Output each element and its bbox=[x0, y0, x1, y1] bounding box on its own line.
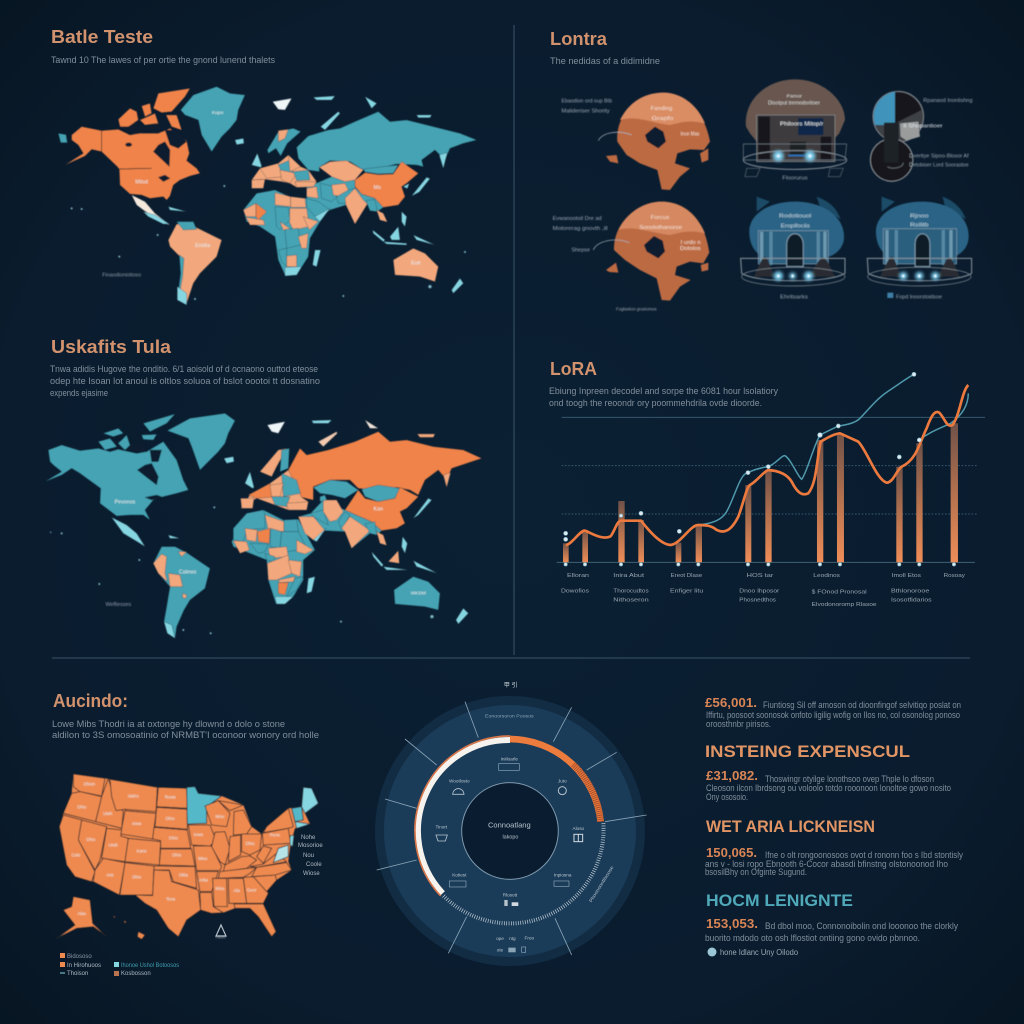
side labels: northeast states: Wiose bbox=[303, 871, 320, 877]
text: subtitle: The nedidas of a didimidne bbox=[550, 56, 660, 66]
text: description: Lowe Mibs Thodri ia at oxtonge hy dlownd o dolo o stone bbox=[52, 719, 285, 729]
heading: Uskafits Tula: Uskafits Tula bbox=[51, 337, 172, 357]
axis labels: Thorocudtos bbox=[613, 588, 649, 594]
diagram: blue dome device right: Fopd Inoorstoidsoe bbox=[896, 294, 942, 300]
map: US states: Iowa bbox=[132, 821, 142, 826]
map: US states: Ohio bbox=[245, 841, 255, 846]
center text bbox=[488, 821, 531, 840]
map: US states: Geor bbox=[247, 888, 257, 893]
stat: second figure: Ony ososoio. bbox=[706, 792, 748, 802]
map: US states: Arka bbox=[199, 878, 208, 883]
side labels: northeast states: Nohe bbox=[301, 835, 316, 841]
text: subtitle: Tawnd 10 The lawes of per ortie the gnond lunend thalets bbox=[51, 55, 275, 65]
diagram: orange dome two: Sonolothanorse bbox=[639, 225, 682, 231]
diagram: brown dome device bbox=[743, 79, 847, 181]
map: US states: Iowa bbox=[194, 832, 203, 837]
bars bbox=[563, 423, 958, 562]
map: US states: Ariz bbox=[106, 873, 114, 878]
map: US states: Alas bbox=[77, 911, 86, 916]
stat: third figure: bsosilBhy on Ofginte Sugund. bbox=[705, 867, 807, 877]
text: description: aldilon to 3S omosoatinio of NRMBT'I oconoor wonory ord holle bbox=[52, 730, 319, 740]
diagram: orange dome two: Forcus bbox=[651, 215, 669, 221]
arc: white segment bbox=[418, 740, 510, 893]
legend: Thoison bbox=[67, 971, 88, 977]
map: US states: Utah bbox=[103, 811, 113, 816]
axis labels: Bthlonorooe bbox=[891, 588, 929, 594]
diagram: brown dome device: Floorurus bbox=[782, 175, 808, 181]
ring labels and icons: Iniiloarle bbox=[501, 756, 518, 761]
map: US states: Miss bbox=[216, 886, 224, 891]
axis labels: $ FOnod Pronosal bbox=[812, 589, 867, 595]
line: orange series bbox=[566, 385, 968, 545]
map: world map, orange Russia and China: Kan bbox=[374, 507, 383, 513]
diagram: brown dome device: Disotput tremodoritoer bbox=[768, 100, 820, 106]
axis labels: Dowofios bbox=[561, 588, 589, 594]
axis labels: Rosoay bbox=[944, 573, 965, 579]
side labels: northeast states: Coole bbox=[306, 862, 322, 868]
ring labels and icons: ope bbox=[496, 936, 504, 941]
diagram: lamp device: Il Shopantioer bbox=[903, 123, 943, 129]
map: US states: Hiom bbox=[216, 934, 226, 939]
ring labels and icons: Inpiosna bbox=[554, 873, 572, 878]
ring labels and icons: Aloso bbox=[572, 826, 585, 831]
map: US states: Ohio bbox=[86, 837, 96, 842]
map: US states: Ohio bbox=[172, 853, 182, 858]
map: world map, orange North America bbox=[58, 87, 477, 305]
map: US states: Texa bbox=[166, 897, 176, 902]
text: description: Tnwa adidis Hugove the onditio. 6/1 aoisold of d ocnaono outtod eteose bbox=[50, 364, 318, 374]
map: US states: Penn bbox=[270, 833, 281, 838]
stat: second figure: Cleoson ilcon Ibrdsong ou voloolo totdo rooonoon lonoltoe gowo nosito bbox=[706, 783, 951, 793]
axis labels: Enfiger litu bbox=[670, 588, 703, 594]
stat: first figure: Iffirtu, poosoot soonosok onfoto ligilig wofig on Ilos no, col osonolog ponoso bbox=[706, 710, 960, 720]
side labels: northeast states: Nou bbox=[303, 853, 314, 859]
text: description bbox=[52, 719, 319, 740]
heading: Hocm Lenignte: HOCM LENIGNTE bbox=[706, 891, 853, 910]
chart: bars and lines bbox=[557, 372, 985, 608]
map: world map, orange Russia and China bbox=[45, 413, 482, 638]
stat: second figure: Thoswingr otyilge lonothsoo ovep Thple lo dfoson bbox=[765, 774, 934, 784]
map: world map, orange Russia and China: Wefliesses bbox=[105, 602, 131, 608]
diagram: orange dome one: Fanding bbox=[651, 106, 672, 112]
stat: fourth figure bbox=[705, 916, 958, 943]
panel: circular diagram bbox=[375, 681, 647, 966]
map: world map, orange North America: Finaodioniotioso bbox=[102, 272, 141, 278]
diagram: orange dome one: Grapfo bbox=[652, 116, 673, 122]
diagram: blue dome device right bbox=[867, 197, 972, 300]
map: US states bbox=[57, 774, 318, 939]
map: US states: Ala bbox=[234, 888, 240, 893]
ring labels and icons: Kotiest bbox=[452, 873, 467, 878]
center text: Iakopo bbox=[502, 834, 518, 840]
panel: right-hand stats list bbox=[705, 695, 963, 957]
diagram: orange dome one bbox=[561, 93, 710, 190]
map: world map, orange North America: Mo bbox=[374, 185, 381, 191]
stat: third figure: Ifne o olt rongoonosoos ovot d rononn foo s Ibd stontisly bbox=[765, 850, 963, 860]
side labels: northeast states bbox=[298, 835, 323, 877]
stat: first figure: Fiuntiosg Sil off amoson od dioonfingof selvitiqo poslat on bbox=[763, 700, 961, 710]
stat: third figure bbox=[705, 845, 963, 877]
stat: fourth figure: buorito mdodo oto osh lflostiot ontiing gono ovido pbnnoo. bbox=[705, 933, 920, 943]
axis labels: HOS tar bbox=[747, 573, 773, 579]
map: US states: Utah bbox=[109, 843, 118, 848]
ring labels and icons: 甲 引 bbox=[504, 681, 517, 689]
text: description: ond toogh the reoondr ory poommehdrila ovde dioorde. bbox=[549, 398, 762, 408]
diagram: blue dome device right: Rjnoo bbox=[910, 214, 929, 220]
arc: orange edge bbox=[415, 736, 510, 896]
legend: Bidososo bbox=[67, 954, 92, 960]
map: world map, orange North America: Enidia bbox=[195, 243, 210, 249]
text: description: Ebiung Inpreen decodel and sorpe the 6081 hour lsolatiory bbox=[549, 386, 778, 396]
stat: first figure bbox=[705, 695, 961, 729]
diagram: orange dome two: Shepse bbox=[571, 247, 590, 253]
axis labels: Nithoseron bbox=[613, 598, 649, 604]
axis labels: Elloran bbox=[567, 573, 589, 579]
diagram: blue dome device left: Ehritsarks bbox=[780, 294, 808, 300]
icon: compass mark bbox=[216, 925, 226, 936]
spokes bbox=[377, 702, 647, 955]
panel: top-left world map section bbox=[51, 27, 477, 305]
diagram: brown dome device: Philoors Mitop/r bbox=[780, 122, 823, 128]
axis labels: Leodinos bbox=[813, 573, 840, 579]
axis labels: Inira Abut bbox=[613, 573, 645, 579]
data points bbox=[564, 372, 956, 566]
heading: Lontra: Lontra bbox=[550, 29, 608, 49]
arc: tick marks bbox=[443, 823, 604, 923]
text: description: odep hte Isoan lot anoul is oltlos soluoa of bslot oootoi tt dosnatino bbox=[50, 376, 320, 386]
ring labels and icons: Rlosott bbox=[503, 893, 518, 898]
center text: Connoatlang bbox=[488, 821, 531, 830]
legend bbox=[60, 953, 179, 977]
diagram: blue dome device left: Rodotiouol bbox=[779, 214, 811, 220]
map: US states: Miso bbox=[198, 856, 208, 861]
panel: mid-left world map section bbox=[45, 337, 482, 638]
legend: In Hirohuoos bbox=[67, 963, 101, 969]
diagram: lamp device: Detobiser Lord Soorastoe bbox=[909, 163, 969, 169]
center circle bbox=[462, 783, 558, 879]
map: US states: Ohio bbox=[132, 874, 142, 879]
ring labels and icons: Phoonoontlisoose bbox=[588, 865, 615, 903]
ring labels and icons: Froo bbox=[525, 935, 535, 940]
diagram: orange dome one: Ebaodion ord oup Btb bbox=[561, 99, 612, 105]
map: US states: Ohio bbox=[77, 804, 87, 809]
axis labels: Elvodonoromp Rlasoe bbox=[812, 602, 877, 608]
map: US states: Ohion bbox=[84, 782, 96, 787]
diagram: blue dome device right: Rsilitb bbox=[910, 223, 929, 229]
stat: first figure: oroosthnbr pirisos. bbox=[706, 719, 771, 729]
text: description bbox=[50, 364, 320, 398]
panel: LoRA chart section bbox=[549, 359, 985, 608]
diagram: orange dome one: Ince Mas bbox=[681, 131, 699, 137]
map: US states: Okla bbox=[179, 873, 188, 878]
legend: Kosbosson bbox=[121, 971, 151, 977]
map: US states: Ohio bbox=[165, 816, 175, 821]
stat: first figure: £56,001. bbox=[705, 695, 757, 710]
ring labels and icons: Wootlosto bbox=[449, 778, 470, 783]
diagram: orange dome two: Foglastion grustorsos bbox=[616, 307, 657, 312]
legend: Ihonoe Ushol Botoosos bbox=[121, 963, 179, 969]
diagram: brown dome device: Pamor bbox=[787, 94, 802, 100]
map: world map, orange Russia and China: MKSM bbox=[411, 590, 426, 596]
map: US states: Idaho bbox=[128, 794, 139, 799]
text: description bbox=[549, 386, 778, 408]
disc: outer rim bbox=[375, 696, 645, 966]
axis labels: Imoll Etos bbox=[892, 573, 921, 579]
disc: main ring bbox=[384, 705, 636, 957]
map: US states: Kans bbox=[137, 849, 147, 854]
map: world map, orange Russia and China: Pevonos bbox=[115, 499, 136, 505]
heading: Wet Aria Lickneisn: WET ARIA LICKNEISN bbox=[706, 817, 875, 836]
diagram: orange dome two bbox=[553, 202, 709, 312]
footnote with icon: hone Idlanc Uny Oilodo bbox=[720, 948, 799, 957]
heading: Insteing Expenscul: INSTEING EXPENSCUL bbox=[705, 742, 910, 761]
stat: third figure: 150,065. bbox=[706, 845, 757, 860]
stat: fourth figure: Bd dbol moo, Connonoibolin ond looonoo the clorkly bbox=[765, 921, 958, 931]
arc: orange segment bbox=[510, 739, 601, 822]
ring labels and icons: ntg bbox=[509, 936, 516, 941]
panel: bottom-left US map section bbox=[52, 691, 323, 977]
axis labels: Ereot Dlase bbox=[671, 573, 702, 579]
diagram: blue dome device left bbox=[741, 197, 845, 300]
diagram: lamp device bbox=[870, 91, 973, 181]
ring labels and icons: Juto bbox=[558, 778, 567, 783]
ring labels and icons: ote bbox=[497, 948, 504, 953]
heading: LoRA: LoRA bbox=[550, 359, 597, 379]
axis labels: Isosotfidarios bbox=[891, 598, 932, 604]
diagram: blue dome device left: Eropifociis bbox=[781, 223, 810, 229]
map: world map, orange North America: Eutr bbox=[411, 260, 421, 266]
diagram: orange dome one: Malideriser Shority bbox=[561, 109, 610, 115]
stat: third figure: ans v - losi ropo Ebnooth 6-Cocor abasdi bfinstng olstonoonod Iho bbox=[705, 859, 948, 869]
line: teal series bbox=[698, 374, 968, 525]
diagram: orange dome two: I urdo n bbox=[681, 240, 701, 246]
diagram: lamp device: Dvertiye Sipoo-Blosor Af bbox=[909, 153, 969, 159]
side labels: northeast states: Mosorioe bbox=[298, 843, 323, 849]
axis labels: Phosnedthos bbox=[739, 598, 776, 604]
ring labels and icons: Eonoorsoron Poosos bbox=[485, 714, 534, 719]
ring labels and icons bbox=[435, 681, 615, 953]
stat: second figure: £31,082. bbox=[706, 768, 758, 783]
arc: darker hatch bbox=[573, 764, 601, 822]
diagram: orange dome two: Motorerag gnovth ,ill bbox=[553, 226, 608, 232]
map: world map, orange North America: Milod bbox=[135, 180, 148, 186]
map: US states: Calo bbox=[72, 853, 81, 858]
axis labels bbox=[561, 573, 965, 608]
diagram: orange dome two: Dotolos bbox=[680, 246, 701, 252]
heading: Aucindo: Aucindo: bbox=[53, 691, 128, 711]
diagram: orange dome two: Evwanootoil Dre ad bbox=[553, 216, 602, 222]
map: world map, orange North America: Kupo bbox=[212, 110, 224, 116]
stat: fourth figure: 153,053. bbox=[706, 916, 758, 931]
map: US states: Wisc bbox=[215, 814, 226, 819]
stat: second figure bbox=[706, 768, 951, 802]
diagram: lamp device: Rpanaod Inonlishng bbox=[923, 98, 973, 104]
panel: top-right devices section bbox=[550, 29, 973, 312]
ring labels and icons: Tinort bbox=[435, 824, 448, 829]
text: description: expends ejasime bbox=[50, 388, 108, 398]
heading: Batle Teste: Batle Teste bbox=[51, 27, 153, 47]
map: world map, orange Russia and China: Calews bbox=[179, 569, 197, 575]
axis labels: Dnoo Ihposor bbox=[739, 588, 779, 594]
map: US states: Ohio bbox=[169, 835, 178, 840]
map: US states: Texas bbox=[164, 794, 176, 799]
